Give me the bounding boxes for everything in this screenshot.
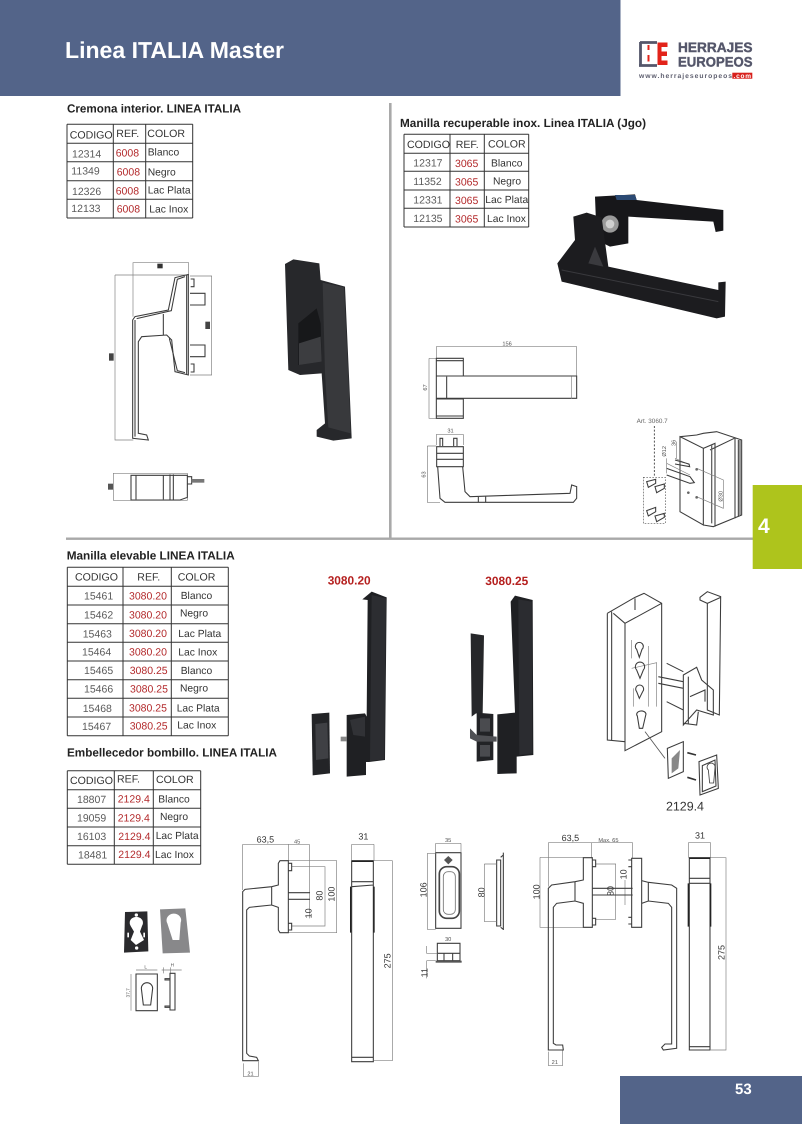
table: Manilla elevable: Negro [180,608,208,619]
escutcheon: photos and drawing: L [144,964,147,970]
table: Cremona interior: REF. [116,128,139,140]
table: Manilla elevable: Lac Inox [178,647,218,658]
table: Cremona interior: 12133 [71,203,101,215]
table: Manilla elevable: Blanco [181,666,212,677]
table: Cremona interior: 6008 [117,166,140,178]
table: Cremona interior: 11349 [71,166,100,178]
table: Manilla elevable: 15463 [83,628,112,640]
photo: recoverable door handle [557,194,726,318]
technical drawing: handle 3080.20 dimensions: 45 [294,838,300,845]
table: Cremona interior: COLOR [147,128,185,140]
table: Embellecedor bombillo [67,771,201,864]
table: Manilla recuperable: 3065 [455,213,479,225]
table: Manilla elevable: Lac Plata [177,703,220,714]
table: Embellecedor bombillo: 2129.4 [118,812,150,824]
technical drawing: door handle views: 156 [502,341,512,347]
escutcheon: photos and drawing: 37,7 [125,988,130,997]
table: Manilla recuperable: Blanco [491,158,523,169]
table: Manilla recuperable: CODIGO [407,139,450,151]
escutcheon: photos and drawing: H [171,962,174,968]
table: Manilla elevable: CODIGO [75,572,118,584]
table: Embellecedor bombillo: 2129.4 [118,831,151,843]
footer page number: 53 [735,1081,752,1098]
technical drawing: pull plate dimensions: 106 [419,882,429,897]
table: Manilla recuperable: 3065 [455,195,479,207]
technical drawing: profile mounting detail Art. 3060.7: Ø12 [661,446,667,457]
technical drawing: handle 3080.25 dimensions: 31 [695,830,705,840]
technical drawing: pull plate dimensions: 80 [477,887,487,897]
technical drawing: door handle views: 31 [447,428,454,434]
logo: Herrajes Europeos: www.herrajeseuropeos [638,73,732,80]
photo: handle 3080.25 [470,596,533,774]
table: Manilla recuperable: Lac Plata [485,195,529,206]
technical drawing: door handle views: 67 [422,384,428,391]
table: Embellecedor bombillo: 18807 [77,794,106,806]
technical drawing: handle 3080.20 dimensions: 31 [358,831,368,841]
technical drawing: handle 3080.20 dimensions: 10 [303,908,313,918]
technical drawing: profile mounting detail Art. 3060.7 [637,418,742,527]
table: Manilla recuperable: REF. [456,139,479,151]
table: Manilla recuperable: 12135 [413,213,443,225]
table: Cremona interior: Lac Plata [148,186,191,197]
table: Manilla elevable: Lac Plata [178,629,222,640]
table: Embellecedor bombillo: 2129.4 [118,849,151,861]
table: Manilla recuperable: COLOR [488,138,526,150]
technical drawing: handle 3080.20 dimensions [243,831,393,1077]
table: Embellecedor bombillo: 19059 [77,812,106,824]
table: Manilla elevable: 15467 [82,721,111,733]
technical drawing: profile mounting detail Art. 3060.7: Ø30 [718,491,724,502]
table: Manilla elevable: 15462 [84,609,113,621]
technical drawing: handle 3080.25 dimensions: 10 [619,869,629,879]
table: Cremona interior: Blanco [148,147,179,158]
table: Cremona interior: 6008 [117,203,140,215]
table: Manilla elevable: COLOR [178,572,216,584]
footer page number [620,1076,802,1124]
table: Manilla elevable: 15466 [84,684,113,696]
table: Manilla elevable: 3080.20 [129,609,167,621]
technical drawing: handle 3080.25 dimensions: 21 [552,1059,558,1065]
table: Cremona interior: Negro [148,167,176,178]
technical drawing: handle 3080.20 dimensions: 275 [383,953,393,968]
heading: Manilla recuperable: Manilla recuperable inox. Linea ITALIA (Jgo) [400,116,646,130]
technical drawing: pull plate dimensions: 35 [445,837,451,843]
technical drawing: cremona top view [108,473,204,500]
photo: cremona handle [285,259,352,441]
technical drawing: profile mounting detail Art. 3060.7: Art. 3060.7 [637,418,668,425]
technical drawing: handle 3080.25 dimensions: Max. 65 [598,837,618,843]
table: Manilla recuperable: 3065 [455,177,479,189]
logo: Herrajes Europeos [638,40,752,80]
technical drawing: cremona side view [109,263,212,440]
technical drawing: handle 3080.20 dimensions: 100 [327,887,337,902]
technical drawing: door handle views [421,341,577,502]
logo: Herrajes Europeos: .com [734,73,751,80]
table: Manilla elevable: Lac Inox [177,721,217,732]
table: Manilla elevable: 3080.25 [129,703,167,715]
table: Embellecedor bombillo: Negro [160,812,188,823]
table: Embellecedor bombillo: 2129.4 [118,794,150,806]
table: Manilla elevable: 3080.25 [130,721,168,733]
table: Cremona interior: CODIGO [70,129,113,141]
table: Cremona interior: 6008 [116,148,139,160]
table: Manilla elevable: REF. [137,572,160,584]
technical drawing: door handle views: 63 [421,471,427,478]
table: Manilla elevable: 15465 [84,665,113,677]
label: 3080.20: 3080.20 [328,574,371,588]
chapter tab: 4 [758,515,770,538]
escutcheon: photos and drawing [124,908,190,1011]
table: Manilla recuperable: Negro [493,176,521,187]
technical drawing: handle 3080.25 dimensions: 100 [531,884,541,899]
table: Manilla elevable: Blanco [181,591,212,602]
technical drawing: pull plate dimensions: 11 [419,968,429,977]
table: Cremona interior: 12326 [72,186,101,198]
table: Embellecedor bombillo: Blanco [158,795,190,806]
label: 3080.25: 3080.25 [485,574,529,588]
table: Manilla recuperable: 11352 [413,176,442,188]
heading: Manilla elevable: Manilla elevable LINEA ITALIA [67,548,235,562]
table: Manilla elevable: 3080.25 [130,684,168,696]
technical drawing: handle 3080.25 dimensions: 63,5 [562,833,579,843]
table: Manilla elevable: 3080.20 [129,628,167,640]
table: Manilla recuperable: 12317 [413,157,443,169]
table: Manilla elevable: 3080.20 [129,646,167,658]
logo: Herrajes Europeos: HERRAJES [678,40,752,55]
table: Manilla recuperable: 12331 [413,194,443,206]
photo: handle 3080.20 [312,592,387,777]
table: Embellecedor bombillo: REF. [117,774,140,786]
technical drawing: handle 3080.25 dimensions: 80 [605,886,615,896]
technical drawing: handle 3080.25 dimensions [531,830,727,1066]
section dividers [66,103,753,540]
heading: Cremona interior: Cremona interior. LINEA ITALIA [67,102,241,116]
label: 2129.4: 2129.4 [666,800,704,814]
technical drawing: handle 3080.20 dimensions: 63,5 [257,835,274,845]
technical drawing: profile mounting detail Art. 3060.7: 36 [671,440,677,446]
logo: Herrajes Europeos: EUROPEOS [678,54,752,70]
table: Cremona interior: Lac Inox [149,204,189,215]
table: Cremona interior [67,124,193,218]
technical drawing: pull plate dimensions [419,837,503,978]
chapter tab [753,485,802,569]
technical drawing: handle 3080.25 dimensions: 275 [717,945,727,960]
table: Manilla elevable: 3080.20 [129,590,167,602]
table: Embellecedor bombillo: COLOR [156,774,194,786]
table: Manilla elevable: 15468 [83,703,112,715]
table: Manilla elevable: Negro [180,683,208,694]
table: Manilla recuperable [404,134,529,227]
technical drawing: handle 3080.20 dimensions: 21 [247,1071,254,1077]
technical drawing: pull plate dimensions: 30 [445,936,451,942]
table: Manilla elevable: 3080.25 [130,665,168,677]
table: Embellecedor bombillo: 18481 [78,850,107,862]
exploded diagram: handle on profile with escutcheon [607,592,721,795]
table: Manilla elevable: 15461 [84,590,113,602]
technical drawing: handle 3080.20 dimensions: 80 [315,891,325,901]
table: Embellecedor bombillo: Lac Inox [155,850,195,861]
title: Linea ITALIA Master [65,37,284,63]
table: Embellecedor bombillo: CODIGO [70,775,113,787]
table: Cremona interior: 12314 [72,148,101,160]
table: Manilla elevable [67,567,228,736]
header banner [0,0,620,96]
table: Manilla recuperable: 3065 [455,158,479,170]
table: Embellecedor bombillo: 16103 [77,831,106,843]
table: Manilla elevable: 15464 [82,646,111,658]
table: Embellecedor bombillo: Lac Plata [156,831,199,842]
heading: Embellecedor bombillo: Embellecedor bombillo. LINEA ITALIA [67,746,277,760]
table: Manilla recuperable: Lac Inox [487,214,527,225]
table: Cremona interior: 6008 [116,185,139,197]
